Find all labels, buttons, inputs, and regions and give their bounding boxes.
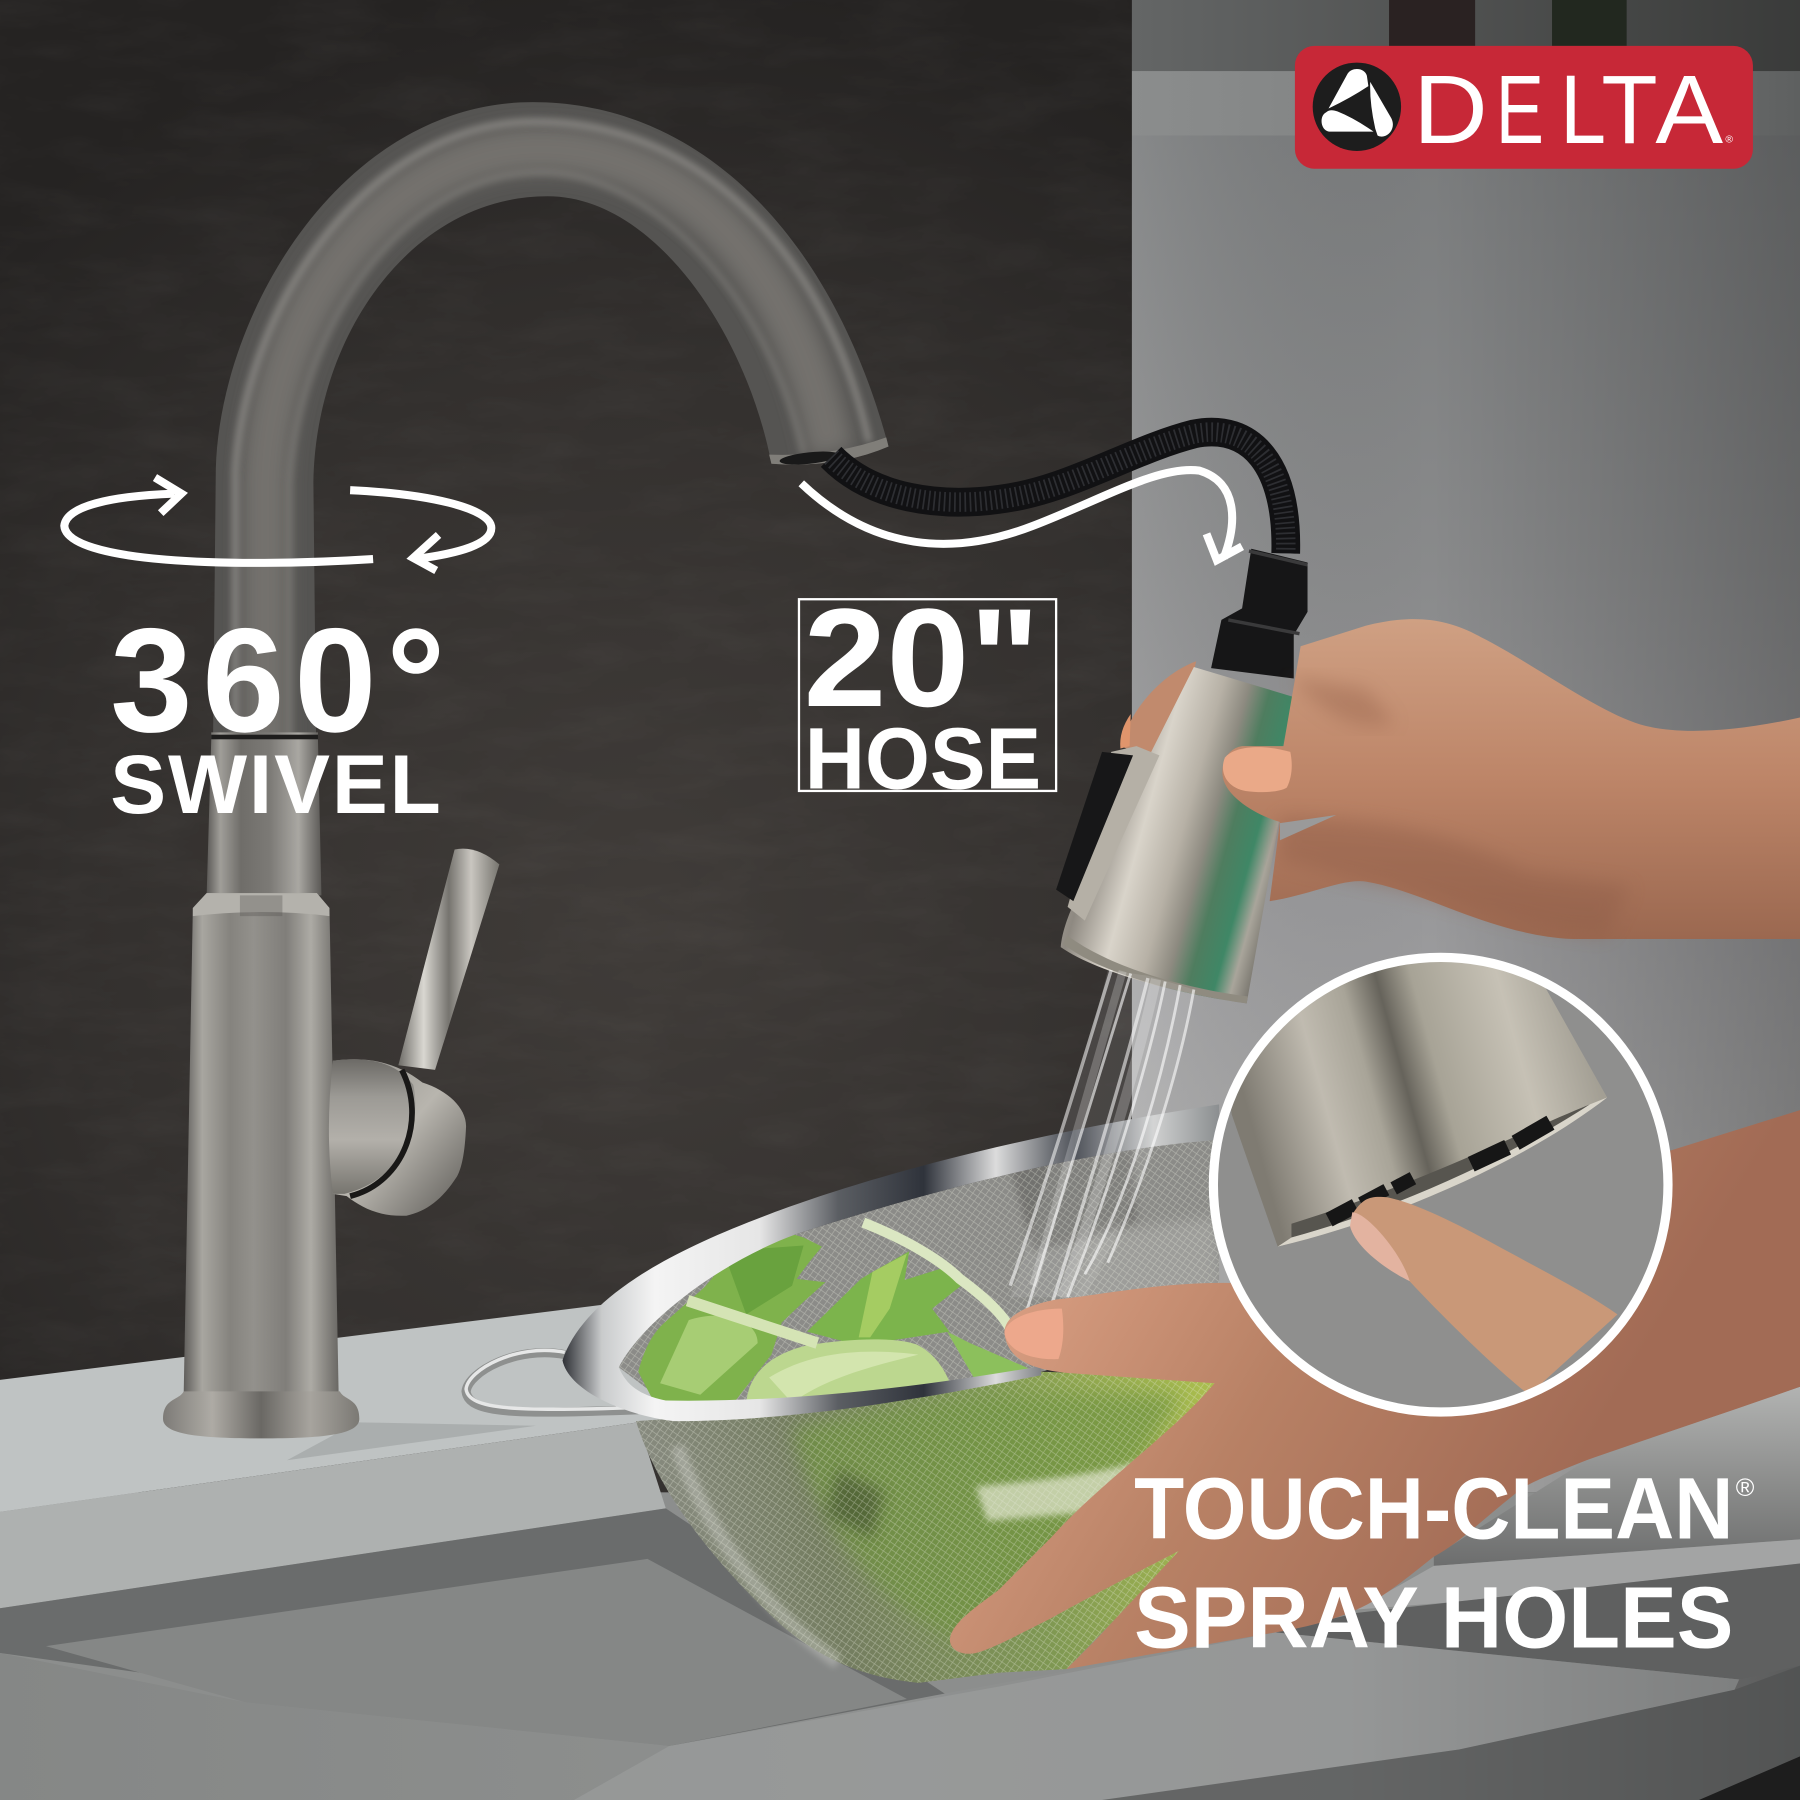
colander bowl mesh <box>636 1372 1219 1683</box>
text: touch-clean spray holes: ® <box>1736 1474 1755 1502</box>
lower hand and arm <box>950 1110 1800 1669</box>
text: touch-clean spray holes: TOUCH-CLEAN <box>1134 1460 1733 1557</box>
sink interior <box>46 1559 907 1746</box>
text: 20 inch hose box <box>799 579 1056 808</box>
counter top <box>0 1288 735 1512</box>
background: right grey wall <box>1125 0 1800 1492</box>
text: touch-clean spray holes: SPRAY HOLES <box>1134 1569 1733 1666</box>
faucet gooseneck spout <box>213 102 888 732</box>
swivel arrows <box>64 478 491 571</box>
right counter and sink corner <box>1434 1387 1800 1566</box>
text: 20 inch hose box: 20" <box>804 579 1040 736</box>
colander rim <box>562 1104 1219 1421</box>
text: 360 degree swivel: SWIVEL <box>110 737 441 831</box>
delta logo: ® <box>1725 134 1733 145</box>
upper hand <box>1222 619 1800 939</box>
background: dark tiled wall <box>0 0 1132 1492</box>
counter front face <box>0 1422 666 1608</box>
colander handle ring <box>466 1350 638 1412</box>
finger pressing nozzle <box>1352 1197 1617 1395</box>
hose arrow <box>801 470 1242 560</box>
finger nail <box>1350 1212 1410 1281</box>
spray head rim <box>1278 1097 1607 1247</box>
faucet lower neck with collar <box>207 732 321 895</box>
delta logo: T <box>1601 55 1658 164</box>
braided hose <box>831 432 1286 553</box>
inset circle: touch-clean spray head <box>1205 918 1668 1412</box>
text: 20 inch hose box: HOSE <box>805 711 1041 808</box>
pull-down sprayer <box>1056 549 1308 1003</box>
kitchen counter and sink <box>0 1288 1800 1800</box>
faucet base <box>163 1391 359 1438</box>
spray head close-up <box>1231 962 1607 1246</box>
delta logo: A <box>1655 55 1723 164</box>
spray head underside <box>1291 1104 1590 1238</box>
faucet body <box>184 893 339 1395</box>
faucet <box>163 102 889 1438</box>
delta logo: L <box>1560 55 1606 164</box>
sink shadow band <box>0 1508 953 1746</box>
upper hand: fingertip behind sprayer <box>1120 661 1196 767</box>
delta logo: E <box>1496 55 1544 164</box>
delta logo: D <box>1413 55 1488 164</box>
delta logo <box>1295 46 1753 169</box>
text: touch-clean spray holes <box>1134 1460 1755 1666</box>
spray nozzles <box>1326 1116 1554 1226</box>
faucet shadow on counter <box>287 1422 536 1460</box>
lettuce in colander <box>638 1223 1037 1407</box>
fingernail <box>1223 747 1292 792</box>
faucet lever handle <box>329 849 499 1216</box>
colander interior <box>619 1140 1219 1403</box>
colander with lettuce <box>466 1104 1219 1683</box>
text: 360 degree swivel: 360° <box>110 598 445 763</box>
water spray <box>1010 970 1194 1309</box>
fingernail <box>1004 1309 1063 1359</box>
sink front rim <box>0 1632 1800 1800</box>
lower arm behind colander <box>1263 1110 1800 1492</box>
